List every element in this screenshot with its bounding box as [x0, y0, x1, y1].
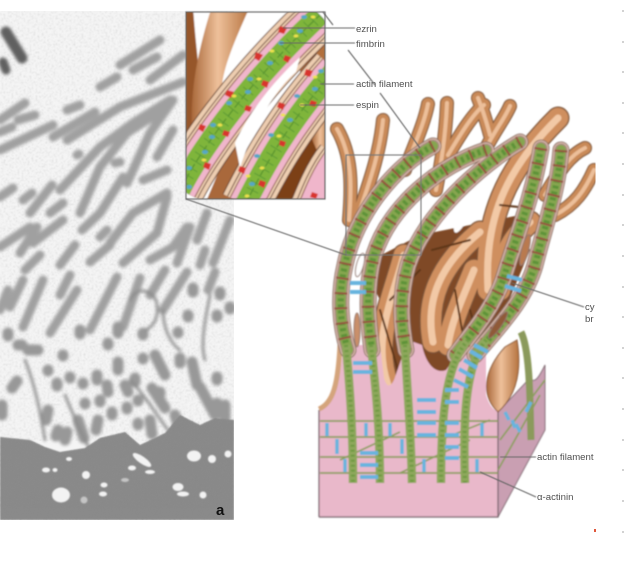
leader lines: [186, 12, 584, 497]
right bulge microvillus: [487, 340, 519, 412]
inset background brown microvilli: [186, 12, 325, 199]
main microvilli illustration: [319, 98, 594, 517]
deep brown background: [376, 215, 531, 374]
label: alpha-actinin: α-actinin: [537, 492, 573, 503]
panel letter a: a: [216, 502, 225, 519]
micrograph: vesicles: [42, 450, 232, 504]
back orange microvilli: [337, 98, 594, 390]
microvillus core bundles with membrane: [341, 142, 561, 355]
inset gap between bands: [235, 57, 300, 168]
white gaps behind microvilli: [381, 196, 465, 234]
left tan edge: [319, 345, 340, 409]
micrograph streaks: microvilli: [0, 32, 230, 450]
inset cut microvilli bands: [186, 12, 325, 199]
label: cytoplasmic bridge clipped: cy: [585, 302, 595, 313]
label: espin: espin: [356, 100, 379, 111]
inset fimbrin markers: [186, 15, 324, 189]
actin filaments in the terminal web: [320, 380, 545, 473]
micrograph: cytoplasm grain: [0, 416, 204, 520]
magnification box on illustration: [346, 155, 421, 255]
blue cytoplasmic bridges and alpha-actinin: [327, 276, 531, 477]
label: cytoplasmic bridge clipped: br: [585, 314, 594, 325]
gaps between fused microvilli: [354, 234, 533, 347]
label: fimbrin: fimbrin: [356, 39, 385, 50]
rootlet bundles in the tissue: [346, 340, 486, 483]
inset detail of microvilli: [186, 12, 325, 199]
inset frame: [186, 12, 325, 199]
label: actin filament top: actin filament: [356, 79, 413, 90]
label: ezrin: ezrin: [356, 24, 377, 35]
label: cytoplasmic bridge clipped: [537, 302, 595, 463]
edge dots: [622, 10, 624, 533]
label: cytoplasmic bridge clipped: actin filament: [537, 452, 594, 463]
panel a: electron micrograph: [0, 11, 234, 521]
inset espin markers: [202, 16, 318, 198]
large central microvilli: [382, 118, 558, 385]
tissue side face: [498, 365, 545, 517]
tissue front face: [319, 340, 498, 517]
micrograph: dark cell cytoplasm: [0, 415, 234, 520]
rootlet filament texture: [346, 340, 486, 483]
red speck: [594, 529, 596, 532]
micrograph: grain texture: [0, 11, 234, 441]
inset ezrin markers: [198, 26, 318, 199]
